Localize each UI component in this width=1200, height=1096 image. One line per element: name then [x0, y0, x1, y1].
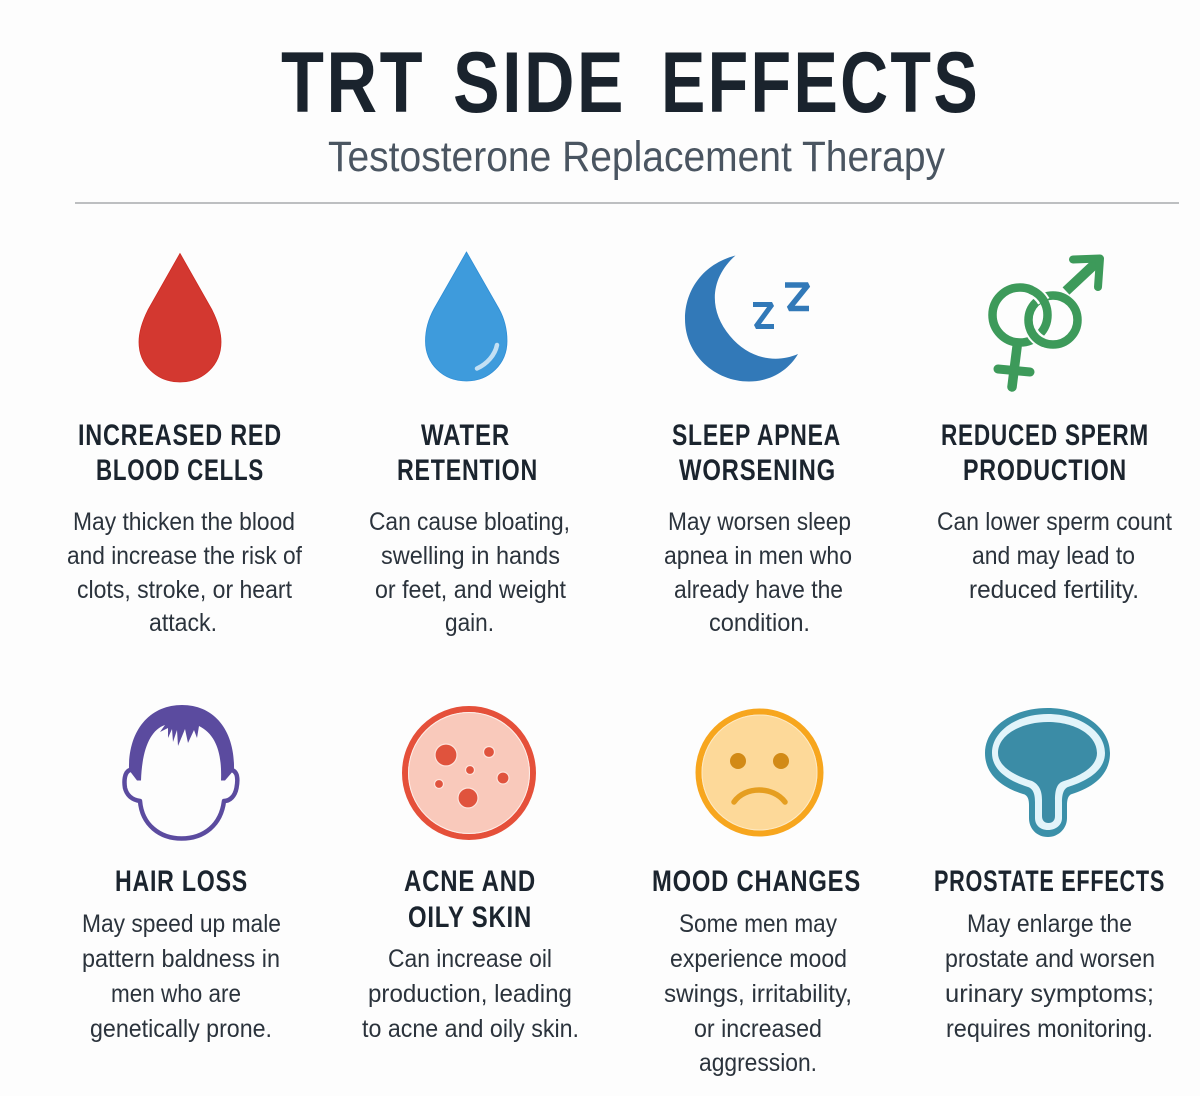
text: red blood cells description: May thicken the blood	[73, 508, 295, 536]
text: water retention description: or feet, and weight	[375, 576, 566, 604]
text: acne description	[362, 945, 579, 1043]
panel: mood changes	[652, 712, 861, 1077]
heading: sleep apnea worsening	[672, 419, 841, 487]
text: sleep apnea description: May worsen sleep	[668, 508, 851, 536]
heading: increased red blood cells: BLOOD CELLS	[96, 454, 264, 487]
icon: head with receding hair	[125, 705, 237, 838]
icon: crescent moon with Z letters	[685, 256, 809, 382]
text: sperm production description: Can lower sperm count	[937, 508, 1172, 536]
text: mood changes description	[664, 910, 852, 1077]
text: red blood cells description: clots, stroke, or heart	[77, 576, 292, 604]
title: EFFECTS	[661, 35, 980, 131]
heading: water retention: WATER	[421, 419, 510, 452]
title: SIDE	[453, 35, 626, 131]
text: red blood cells description: attack.	[149, 609, 217, 637]
text: sleep apnea description	[664, 508, 852, 637]
heading: acne and oily skin	[404, 865, 536, 934]
heading: sleep apnea worsening: WORSENING	[679, 454, 836, 487]
heading: water retention: RETENTION	[397, 454, 538, 487]
heading: reduced sperm production: PRODUCTION	[963, 454, 1127, 487]
panel: increased red blood cells	[67, 254, 302, 637]
heading: increased red blood cells: INCREASED RED	[78, 419, 282, 452]
text: water retention description	[369, 508, 570, 637]
panel: sleep apnea worsening	[664, 256, 852, 637]
text: acne description: production, leading	[368, 980, 572, 1008]
heading: increased red blood cells	[78, 419, 282, 487]
text: mood changes description: aggression.	[699, 1049, 817, 1077]
text: red blood cells description	[67, 508, 302, 637]
subtitle: Testosterone Replacement Therapy	[328, 133, 945, 181]
text: red blood cells description: and increase the risk of	[67, 542, 302, 570]
icon: water drop	[426, 252, 507, 381]
text: sleep apnea description: apnea in men who	[664, 542, 852, 570]
text: hair loss description: May speed up male	[82, 910, 281, 938]
icon: red blood drop	[139, 254, 221, 382]
text: sleep apnea description: already have the	[674, 576, 843, 604]
text: prostate description: requires monitoring.	[946, 1015, 1153, 1043]
text: sperm production description: and may lead to	[972, 542, 1135, 570]
text: acne description: to acne and oily skin.	[362, 1015, 579, 1043]
icon: skin circle with acne spots	[405, 709, 533, 837]
text: prostate description	[945, 910, 1155, 1043]
text: hair loss description	[82, 910, 281, 1043]
text: mood changes description: swings, irritability,	[664, 980, 852, 1008]
text: mood changes description: or increased	[694, 1015, 822, 1043]
text: hair loss description: pattern baldness in	[82, 945, 280, 973]
heading: sleep apnea worsening: SLEEP APNEA	[672, 419, 841, 452]
text: sperm production description: reduced fertility.	[969, 576, 1139, 604]
text: mood changes description: experience mood	[670, 945, 847, 973]
heading: acne and oily skin: ACNE AND	[404, 865, 536, 898]
text: acne description: Can increase oil	[388, 945, 552, 973]
heading: reduced sperm production	[941, 419, 1149, 487]
text: hair loss description: men who are	[111, 980, 241, 1008]
icon: sad face	[698, 712, 820, 834]
text: mood changes description: Some men may	[679, 910, 837, 938]
text: water retention description: swelling in hands	[381, 542, 560, 570]
heading: water retention	[397, 419, 538, 487]
text: water retention description: Can cause bloating,	[369, 508, 570, 536]
text: prostate description: prostate and worsen	[945, 945, 1155, 973]
heading: mood changes: MOOD CHANGES	[652, 865, 861, 898]
heading: acne and oily skin: OILY SKIN	[408, 901, 532, 934]
text: water retention description: gain.	[445, 609, 494, 637]
panel: reduced sperm production	[937, 258, 1172, 604]
panel: prostate effects	[934, 708, 1165, 1043]
title: TRT	[281, 35, 425, 131]
icon: prostate	[985, 708, 1110, 837]
panel: hair loss	[82, 705, 281, 1043]
text: hair loss description: genetically prone.	[90, 1015, 272, 1043]
icon: intertwined male and female symbols	[992, 258, 1100, 387]
title	[281, 35, 980, 131]
panel: acne and oily skin	[362, 709, 579, 1043]
heading: hair loss: HAIR LOSS	[115, 865, 248, 898]
text: sperm production description	[937, 508, 1172, 604]
text: prostate description: urinary symptoms;	[945, 980, 1154, 1008]
text: sleep apnea description: condition.	[709, 609, 810, 637]
panel: water retention	[369, 252, 570, 637]
text: prostate description: May enlarge the	[967, 910, 1132, 938]
